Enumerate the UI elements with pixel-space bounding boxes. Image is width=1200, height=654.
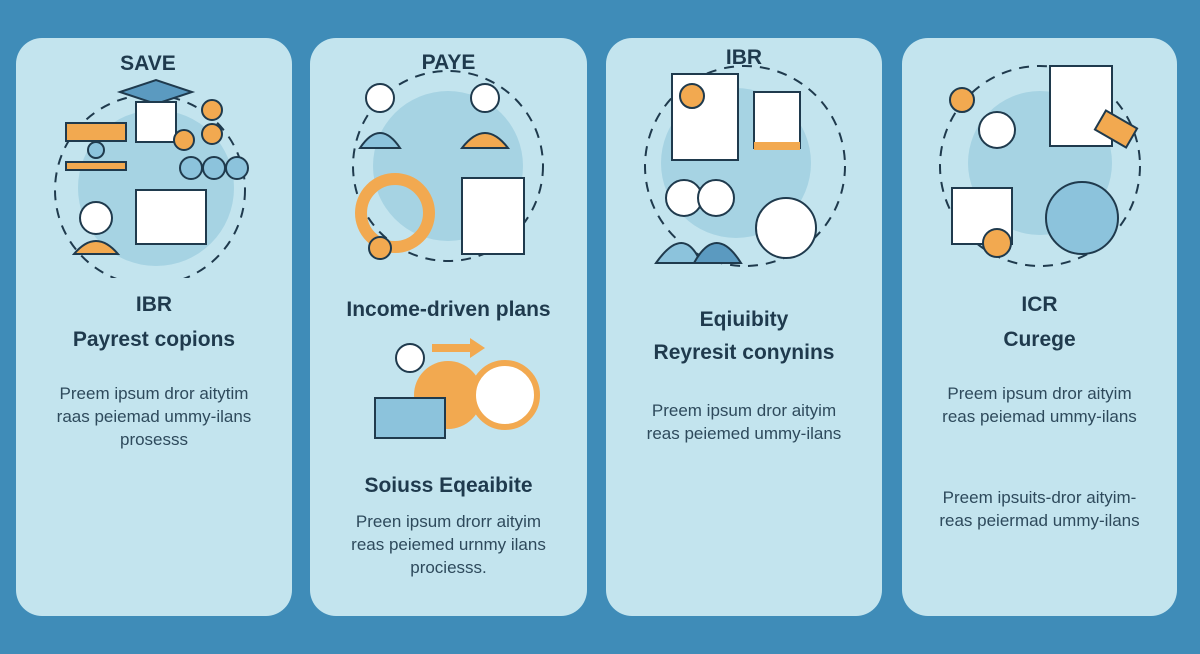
heading: Income-driven plans: Income-driven plans xyxy=(346,298,551,321)
text block: reas peiemad ummy-ilans xyxy=(942,407,1137,426)
heading: IBR: IBR xyxy=(726,46,762,69)
heading: Soiuss Eqeaibite: Soiuss Eqeaibite xyxy=(364,474,533,497)
text block: Preem ipsum dror aityim xyxy=(947,384,1132,403)
heading: ICR: ICR xyxy=(1021,293,1058,316)
text block xyxy=(57,384,251,449)
panel: IBR xyxy=(606,38,882,616)
subheading: Curege xyxy=(1003,328,1076,351)
heading: SAVE: SAVE xyxy=(120,52,176,75)
panel: ICR xyxy=(902,38,1177,616)
text block: Preem ipsuits-dror aityim- xyxy=(943,488,1136,507)
text block xyxy=(351,512,546,577)
icon group: ICR illustration xyxy=(939,65,1141,267)
panel: PAYE xyxy=(310,38,587,616)
text block: Preem ipsum dror aityim xyxy=(652,401,836,420)
icon group: IBR illustration xyxy=(644,65,846,267)
icon group: SAVE illustration xyxy=(54,79,249,278)
text block: reas peiemed ummy-ilans xyxy=(647,424,841,443)
text block: prosesss xyxy=(120,430,188,449)
text block: raas peiemad ummy-ilans xyxy=(57,407,251,426)
text block: reas peiemed urnmy ilans xyxy=(351,535,546,554)
text block xyxy=(939,488,1140,530)
text block: reas peiermad ummy-ilans xyxy=(939,511,1140,530)
heading: IBR: IBR xyxy=(136,293,172,316)
text block xyxy=(647,401,841,443)
heading: Eqiuibity: Eqiuibity xyxy=(700,308,788,331)
text block: Preen ipsum drorr aityim xyxy=(356,512,541,531)
panel: SAVE xyxy=(16,38,292,616)
text block xyxy=(942,384,1137,426)
heading: PAYE: PAYE xyxy=(422,51,475,74)
subheading: Payrest copions xyxy=(73,328,235,351)
icon group: PAYE illustration xyxy=(352,70,544,439)
text block: prociesss. xyxy=(410,558,487,577)
text block: Preem ipsum dror aitytim xyxy=(60,384,248,403)
subheading: Reyresit conynins xyxy=(654,341,834,364)
